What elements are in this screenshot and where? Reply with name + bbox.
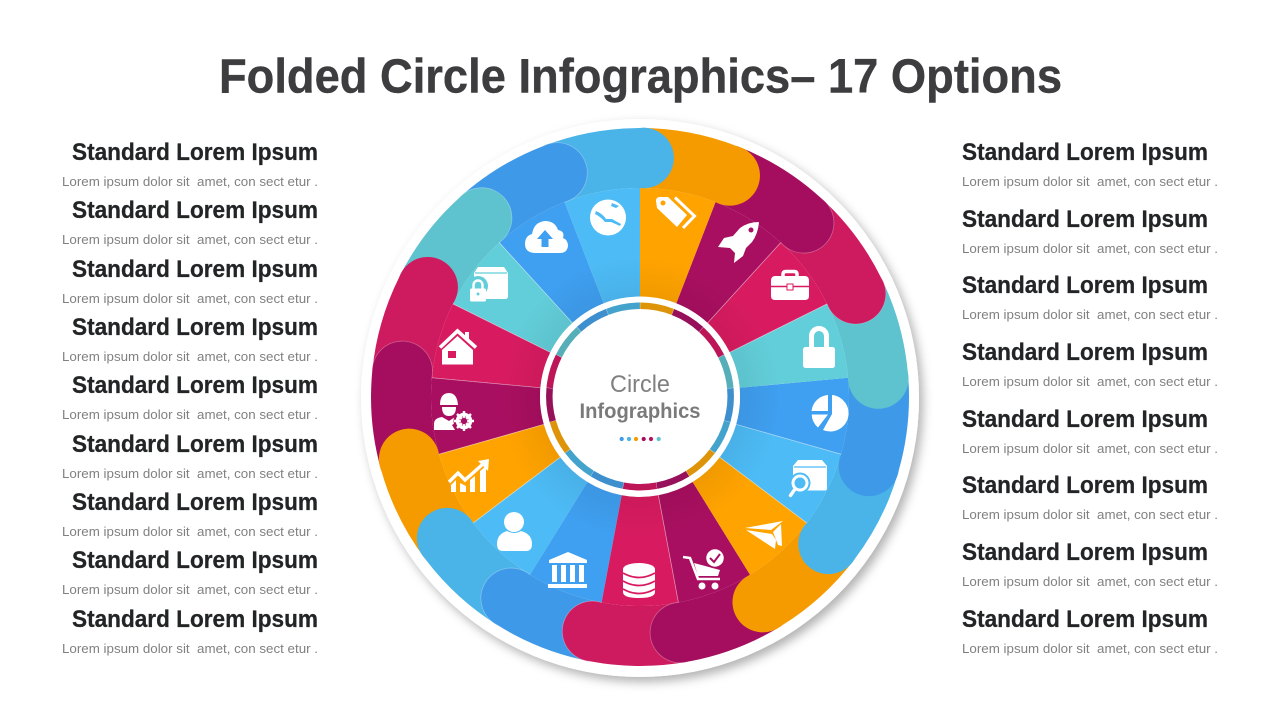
left item 3: Lorem ipsum dolor sit amet, con sect etur .	[62, 291, 318, 306]
right item 4: Lorem ipsum dolor sit amet, con sect etur .	[962, 374, 1218, 389]
segment 11: light blue	[396, 413, 591, 626]
icon: rocket	[718, 222, 759, 263]
right item 2	[962, 206, 1218, 256]
right item 8: Lorem ipsum dolor sit amet, con sect etur .	[962, 641, 1218, 656]
left item 9	[62, 606, 318, 656]
outer white disc with shadow	[361, 119, 919, 677]
segment 10: blue	[473, 467, 623, 661]
icon: shopping cart	[683, 548, 724, 590]
left item 1: Lorem ipsum dolor sit amet, con sect etur .	[62, 174, 318, 189]
left text column	[62, 139, 318, 656]
left item 9: Standard Lorem Ipsum	[72, 606, 318, 633]
segment 17: light blue	[543, 103, 718, 310]
hub coloured ring	[544, 300, 736, 492]
icon: cloud upload	[525, 221, 568, 253]
center hub	[540, 296, 740, 496]
right item 7: Lorem ipsum dolor sit amet, con sect etur .	[962, 574, 1218, 589]
left item 1	[62, 139, 318, 189]
hub heading: Infographics: Infographics	[580, 400, 700, 423]
left item 8: Lorem ipsum dolor sit amet, con sect etur .	[62, 582, 318, 597]
segment 17 lobe folded over segment 1	[620, 120, 683, 191]
right item 3: Lorem ipsum dolor sit amet, con sect etur .	[962, 307, 1218, 322]
segment 4: teal	[723, 277, 934, 463]
right item 5	[962, 406, 1218, 456]
left item 6	[62, 431, 318, 481]
wedge separator hairlines	[432, 243, 841, 602]
icon: person	[497, 512, 532, 551]
right item 5: Lorem ipsum dolor sit amet, con sect etur .	[962, 441, 1218, 456]
icon: globe	[590, 200, 626, 236]
right item 5: Standard Lorem Ipsum	[962, 406, 1208, 433]
right item 6	[962, 472, 1218, 522]
hub dots	[620, 437, 661, 441]
right item 1: Lorem ipsum dolor sit amet, con sect etur .	[962, 174, 1218, 189]
left item 5: Standard Lorem Ipsum	[72, 372, 318, 399]
left item 6: Lorem ipsum dolor sit amet, con sect etur .	[62, 466, 318, 481]
icons	[434, 197, 849, 598]
right item 8	[962, 606, 1218, 656]
segment 2: purple	[674, 146, 849, 353]
left item 6: Standard Lorem Ipsum	[72, 431, 318, 458]
segment 6: light blue	[697, 423, 899, 586]
right item 2: Lorem ipsum dolor sit amet, con sect etur .	[962, 241, 1218, 256]
segment 3: crimson	[703, 198, 910, 409]
left item 8	[62, 547, 318, 597]
icon: worker with gear	[434, 393, 474, 432]
icon: paper plane	[745, 521, 783, 549]
icon: database	[623, 563, 655, 598]
left item 9: Lorem ipsum dolor sit amet, con sect etur .	[62, 641, 318, 656]
icon: growth chart	[449, 459, 489, 492]
right item 1: Standard Lorem Ipsum	[962, 139, 1208, 166]
left item 4: Standard Lorem Ipsum	[72, 314, 318, 341]
left item 1: Standard Lorem Ipsum	[72, 139, 318, 166]
left item 2	[62, 197, 318, 247]
right item 3	[962, 272, 1218, 322]
left item 3: Standard Lorem Ipsum	[72, 256, 318, 283]
segment 5: blue	[733, 372, 919, 508]
left item 2: Standard Lorem Ipsum	[72, 197, 318, 224]
left item 5: Lorem ipsum dolor sit amet, con sect etur .	[62, 407, 318, 422]
segment 13: purple	[348, 307, 550, 471]
icon: box with magnifier	[790, 460, 827, 496]
segment 9: crimson	[539, 489, 689, 683]
left item 4	[62, 314, 318, 364]
segment 12: orange	[353, 357, 566, 559]
segment 14: crimson	[372, 253, 558, 388]
left item 8: Standard Lorem Ipsum	[72, 547, 318, 574]
icon: tags	[656, 197, 694, 228]
segment 15: teal	[399, 170, 610, 355]
icon: house	[440, 331, 476, 364]
segment 8: purple	[587, 476, 782, 689]
icon: briefcase	[771, 272, 809, 300]
left item 7: Lorem ipsum dolor sit amet, con sect etur .	[62, 524, 318, 539]
left item 4: Lorem ipsum dolor sit amet, con sect etur .	[62, 349, 318, 364]
right item 7	[962, 539, 1218, 589]
right item 4: Standard Lorem Ipsum	[962, 339, 1208, 366]
right item 7: Standard Lorem Ipsum	[962, 539, 1208, 566]
icon: pie chart	[812, 395, 849, 432]
right item 8: Standard Lorem Ipsum	[962, 606, 1208, 633]
title: Folded Circle Infographics– 17 Options	[219, 50, 1062, 104]
right item 2: Standard Lorem Ipsum	[962, 206, 1208, 233]
right text column	[962, 139, 1218, 656]
segment 7: orange	[642, 453, 855, 655]
segment 16: blue	[459, 117, 666, 328]
left item 3	[62, 256, 318, 306]
segment 1: orange	[640, 128, 760, 304]
left item 7: Standard Lorem Ipsum	[72, 489, 318, 516]
icon: box with lock	[468, 267, 508, 302]
left item 5	[62, 372, 318, 422]
icon: bank building	[548, 552, 587, 588]
right item 3: Standard Lorem Ipsum	[962, 272, 1208, 299]
hub white disc	[540, 296, 740, 496]
right item 4	[962, 339, 1218, 389]
right item 6: Standard Lorem Ipsum	[962, 472, 1208, 499]
right item 1	[962, 139, 1218, 189]
folded circle wheel	[348, 103, 934, 689]
hub heading: Circle: Circle	[610, 371, 670, 398]
left item 7	[62, 489, 318, 539]
right item 6: Lorem ipsum dolor sit amet, con sect etur .	[962, 507, 1218, 522]
icon: padlock	[803, 329, 835, 368]
left item 2: Lorem ipsum dolor sit amet, con sect etur .	[62, 232, 318, 247]
inner shading on wedges	[500, 257, 780, 537]
